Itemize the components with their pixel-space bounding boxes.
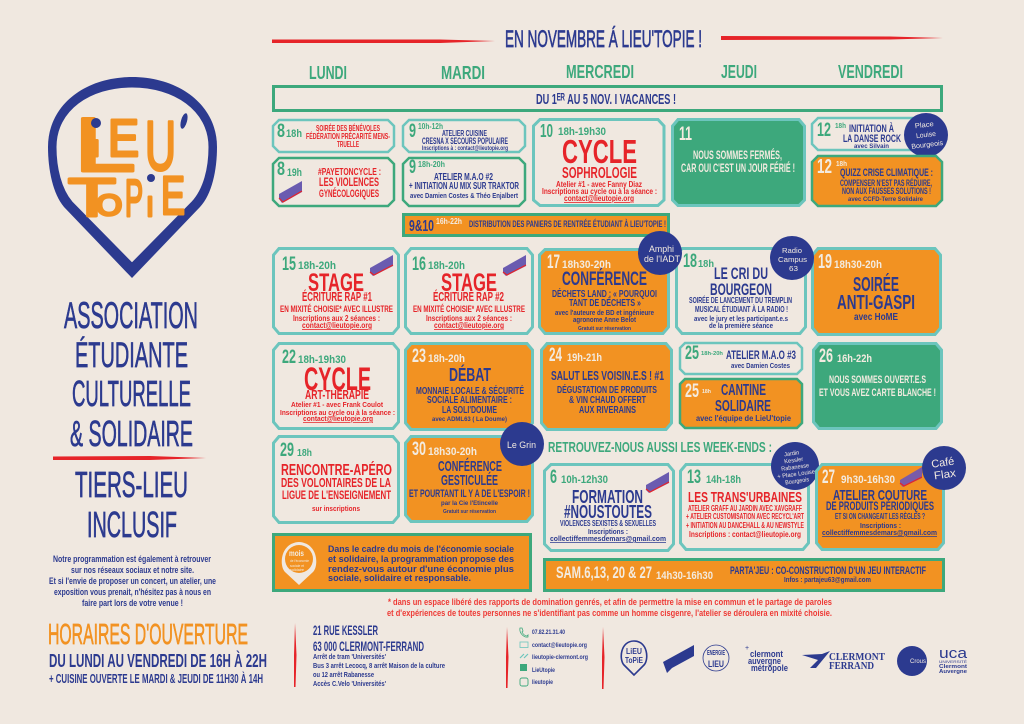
card: 8 soirée des bénévoles: FÉDÉRATION PRÉCARITÉ MENS-	[306, 132, 390, 141]
text block: programme note: Et si l'envie de proposer un concert, un atelier, une	[49, 576, 216, 586]
card: 12 danse rock: avec Silvain	[854, 143, 889, 150]
card: 12 quizz climatique: 12	[817, 156, 832, 178]
card: 25 atelier MAO 3: avec Damien Costes	[731, 363, 790, 370]
card: 17 conférence déchets: TANT DE DÉCHETS »	[569, 296, 641, 309]
location: Jardin Kessler: + Place Louise	[777, 469, 816, 481]
address block: 63 000 CLERMONT-FERRAND	[313, 638, 424, 654]
opening hours: HORAIRES D'OUVERTURE	[48, 619, 248, 651]
card: 13 trans'urbaines: + ATELIER CUSTOMISATION AVEC RECYCL'ART	[686, 512, 804, 521]
card: 8 soirée des bénévoles: TRUELLE	[337, 140, 359, 149]
logo: Lieu'Topie pin: E	[108, 110, 139, 168]
card: 30 conférence gesticulée: 18h30-20h	[428, 446, 477, 458]
card: 30 conférence gesticulée: CONFÉRENCE	[438, 458, 502, 475]
card: 24 salut les voisin.e.s: AUX RIVERAINS	[579, 404, 636, 416]
location: Amphi de l'IADT: Amphi	[649, 244, 674, 254]
logo: circle: LIEU	[708, 659, 724, 669]
card: 18 le cri du bourgeon: 18	[683, 251, 697, 272]
heading: association description: & SOLIDAIRE	[70, 413, 193, 454]
card: 23 débat: DÉBAT	[449, 364, 491, 385]
card: 22 cycle art-thérapie: Inscriptions au cycle ou à la séance :	[280, 408, 395, 417]
card: 24 salut les voisin.e.s: & VIN CHAUD OFFERT	[569, 394, 646, 406]
contacts: 07.82.21.31.40	[532, 629, 565, 636]
card: 15 stage rap 1: STAGE	[308, 269, 364, 297]
card: 13 trans'urbaines: Inscriptions : contact@lieutopie.org	[689, 530, 801, 539]
partner logos	[621, 641, 968, 676]
card: 10 cycle sophrologie: 18h-19h30	[558, 126, 606, 138]
icon: stamp	[503, 255, 526, 276]
icon: stamp	[646, 472, 669, 493]
card: 17 conférence déchets: CONFÉRENCE	[562, 268, 647, 290]
card: 27 atelier couture	[816, 464, 944, 550]
location: Radio Campus 63: Campus	[778, 255, 807, 264]
card: 11 jour férié: 11	[679, 124, 692, 145]
card: 13 trans'urbaines: LES TRANS'URBAINES	[688, 489, 802, 506]
card: 29 rencontre-apéro: sur inscriptions	[312, 504, 360, 513]
address block: ou 12 arrêt Rabanesse	[313, 670, 374, 679]
logo: Lieu'Topie pin: ı	[146, 183, 154, 224]
card: 12 quizz climatique	[812, 156, 942, 206]
icon: mois ESS: sociale et	[290, 563, 305, 568]
card: 15 stage rap 1: 15	[282, 254, 296, 275]
card: 12 danse rock: INITIATION À	[849, 122, 894, 135]
card: 26 carte blanche: ET VOUS AVEZ CARTE BLANCHE !	[819, 387, 936, 399]
weekday headers: MARDI	[441, 63, 485, 83]
card: 27 atelier couture: ET SI ON CHANGEAIT LES RÈGLES ?	[835, 512, 925, 521]
card: 9 atelier MAO 2	[403, 157, 525, 206]
card: 16 stage rap 2: 16	[412, 254, 426, 275]
card: 24 salut les voisin.e.s: DÉGUSTATION DE PRODUITS	[557, 383, 657, 396]
heading: tiers-lieu inclusif	[75, 464, 188, 545]
card: 22 cycle art-thérapie: Atelier #1 - avec Frank Coulot	[291, 400, 383, 409]
card: 17 conférence déchets: agronome Anne Belot	[573, 317, 637, 324]
card: 12 danse rock	[812, 118, 935, 150]
bar: parta'jeu: Infos : partajeu63@gmail.com	[784, 577, 871, 584]
card: 27 atelier couture: ATELIER COUTURE	[833, 487, 927, 504]
card: 25 atelier MAO 3: ATELIER M.A.O #3	[726, 348, 796, 362]
card: 9 atelier MAO 2: + INITIATION AU MIX SUR TRAKTOR	[409, 181, 519, 192]
logo: circle: ENERGIE	[707, 650, 725, 657]
card: 13 trans'urbaines: ATELIER GRAFF AU JARDIN AVEC XAVGRAFF	[688, 504, 802, 513]
logo: Crous	[897, 646, 927, 676]
card: 24 salut les voisin.e.s: SALUT LES VOISIN.E.S ! #1	[551, 368, 664, 383]
card: 16 stage rap 2: ÉCRITURE RAP #2	[433, 289, 504, 304]
opening hours: + CUISINE OUVERTE LE MARDI & JEUDI DE 11H30 À 14H	[49, 671, 263, 686]
contacts: contact@lieutopie.org	[532, 642, 587, 649]
card: 6 formation noustoutes: 6	[550, 467, 557, 488]
bar: parta'jeu: SAM.6,13, 20 & 27	[556, 564, 652, 582]
card: 27 atelier couture: 27	[822, 467, 835, 488]
card: 22 cycle art-thérapie: contact@lieutopie.org	[303, 414, 373, 423]
bar: distribution des paniers: 9&10	[409, 218, 434, 235]
card: 18 le cri du bourgeon: SOIRÉE DE LANCEMENT DU TREMPLIN	[689, 295, 792, 305]
logo: Lieu'Topie small	[621, 641, 647, 675]
card: 10 cycle sophrologie	[534, 120, 664, 206]
card: 18 le cri du bourgeon: avec le jury et les participant.e.s	[694, 316, 788, 323]
card: 19 soirée anti-gaspi: SOIRÉE	[853, 273, 899, 296]
logo: Lieu'Topie pin	[48, 77, 217, 278]
card: 26 carte blanche	[814, 344, 942, 428]
card: 22 cycle art-thérapie: ART-THÉRAPIE	[305, 387, 369, 402]
location: Café Flax: Café	[931, 456, 955, 471]
card: 18 le cri du bourgeon: de la première séance	[709, 323, 773, 330]
card: 10 cycle sophrologie: 10	[540, 121, 553, 141]
card: 22 cycle art-thérapie: 22	[282, 347, 296, 368]
footnote	[387, 597, 832, 619]
location: Jardin Kessler: Kessler	[784, 457, 804, 465]
card: 13 trans'urbaines: + INITIATION AU DANCEHALL & AU NEWSTYLE	[686, 521, 804, 530]
opening hours: DU LUNDI AU VENDREDI DE 16H À 22H	[49, 650, 267, 671]
panel: mois de l'économie sociale et solidaire: Dans le cadre du mois de l'économie sociale	[328, 544, 514, 555]
card: 18 le cri du bourgeon: MUSICAL ÉTUDIANT À LA RADIO !	[695, 304, 788, 314]
card: 8 payetoncycle	[273, 158, 394, 206]
panel: mois de l'économie sociale et solidaire: et solidaire, la programmation propose des	[328, 554, 514, 565]
location: Amphi de l'IADT	[638, 231, 682, 275]
card: 6 formation noustoutes: collectiffemmesdemars@gmail.com	[550, 534, 666, 543]
card: 23 débat: 23	[412, 346, 426, 367]
location: Jardin Kessler: Rabanesse	[781, 463, 810, 473]
location: Le Grin: Le Grin	[507, 440, 536, 451]
logo: Université Clermont Auvergne	[939, 645, 968, 675]
card: 29 rencontre-apéro: 18h	[297, 448, 312, 459]
card: 23 débat: avec ADML63 ( La Doume)	[432, 416, 507, 423]
card: 16 stage rap 2: STAGE	[441, 269, 497, 297]
contacts: LieUtopie	[532, 667, 555, 674]
text block: programme note: exposition vous prenait, n'hésitez pas à nous en	[54, 587, 211, 597]
contacts: lieutopie-clermont.org	[532, 654, 588, 661]
location: Jardin Kessler: Jardin	[784, 450, 800, 458]
card: 12 quizz climatique: NON AUX FAUSSES SOLUTIONS !	[842, 186, 931, 196]
card: 13 trans'urbaines: 13	[687, 467, 701, 488]
card: 12 quizz climatique: COMPENSER N'EST PAS RÉDUIRE,	[840, 178, 932, 188]
logo: Lieu'Topie pin: E	[161, 166, 185, 226]
card: 9 atelier MAO 2: 9	[409, 157, 416, 178]
card: 15 stage rap 1: contact@lieutopie.org	[302, 321, 372, 330]
card: 27 atelier couture: DE PRODUITS PÉRIODIQUES	[826, 498, 934, 513]
logo: Clermont-Ferrand: CLERMONT	[829, 651, 886, 663]
logo: Université Clermont Auvergne: uca	[939, 645, 968, 662]
card: 25 cantine solidaire: 18h	[702, 389, 711, 395]
panel: mois de l'économie sociale et solidaire: rendez-vous autour d'une économie plus	[328, 564, 514, 575]
card: 8 payetoncycle: 8	[277, 159, 285, 180]
card: 8 soirée des bénévoles: 18h	[286, 128, 302, 140]
location: Radio Campus 63: 63	[789, 264, 798, 273]
card: 26 carte blanche: 26	[819, 346, 833, 367]
address block: 21 RUE KESSLER	[313, 622, 378, 638]
card: 17 conférence déchets: 17	[547, 252, 560, 273]
logo: Clermont Auvergne Métropole: auvergne	[748, 656, 781, 666]
icon: instagram	[520, 678, 528, 686]
card: 29 rencontre-apéro	[274, 436, 398, 522]
heading: association description	[64, 295, 198, 454]
panel: mois de l'économie sociale et solidaire: sociale, solidaire et responsable.	[328, 573, 471, 584]
address block	[313, 622, 445, 688]
card: 22 cycle art-thérapie	[274, 344, 398, 428]
location: Le Grin	[500, 422, 544, 466]
logo: circle	[703, 645, 729, 671]
card: 23 débat: 18h-20h	[428, 353, 465, 365]
card: 9 atelier cuisine: 10h-12h	[418, 122, 443, 131]
heading: tiers-lieu inclusif: INCLUSIF	[87, 504, 177, 545]
logo: Clermont Auvergne Métropole: métropole	[751, 663, 788, 673]
card: 25 cantine solidaire: avec l'équipe de LieU'topie	[696, 414, 792, 423]
logo: Clermont-Ferrand: FERRAND	[829, 660, 874, 672]
logo: Lieu'Topie pin: U	[145, 107, 176, 185]
card: 10 cycle sophrologie: SOPHROLOGIE	[562, 165, 637, 182]
card: 10 cycle sophrologie: CYCLE	[562, 133, 637, 170]
location: Café Flax: Flax	[933, 467, 957, 482]
card: 30 conférence gesticulée: par la Cie l'Etincelle	[441, 500, 498, 507]
logo: Clermont Auvergne Métropole: +	[745, 645, 749, 652]
location: Café Flax	[922, 446, 966, 490]
card: 8 soirée des bénévoles	[273, 120, 394, 152]
card: 8 payetoncycle: LES VIOLENCES	[319, 175, 379, 189]
card: 9 atelier cuisine: CRESNA X SECOURS POPULAIRE	[422, 136, 508, 146]
card: 17 conférence déchets: avec l'auteure de BD et ingénieure	[555, 310, 654, 317]
bar: distribution des paniers: DISTRIBUTION DES PANIERS DE RENTRÉE ÉTUDIANT À LIEU'TOPIE !	[469, 219, 666, 230]
weekday headers: MERCREDI	[566, 62, 634, 82]
heading: association description: ASSOCIATION	[64, 295, 198, 336]
card: 19 soirée anti-gaspi: 19	[818, 251, 832, 273]
card: 15 stage rap 1: ÉCRITURE RAP #1	[302, 289, 372, 304]
card: 29 rencontre-apéro: 29	[280, 440, 294, 461]
card: 30 conférence gesticulée	[406, 436, 532, 522]
card: 6 formation noustoutes: FORMATION	[572, 487, 643, 507]
icon: mois ESS: mois	[289, 549, 304, 558]
heading: tiers-lieu inclusif: TIERS-LIEU	[75, 464, 188, 505]
contacts: lieutopie	[532, 679, 553, 686]
address block: Accès C.Velo 'Universités'	[313, 679, 386, 688]
icon: stamp	[900, 467, 922, 487]
card: 16 stage rap 2: 18h-20h	[428, 260, 465, 272]
weekday headers: LUNDI	[309, 63, 347, 83]
card: 8 soirée des bénévoles: SOIRÉE DES BÉNÉVOLES	[316, 124, 380, 133]
card: 13 trans'urbaines	[680, 464, 808, 550]
card: 16 stage rap 2	[406, 248, 532, 334]
weekday headers: JEUDI	[721, 62, 757, 82]
footnote: et d'expériences de toutes personnes ne s'identifiant pas comme un homme cisgenre, l'atelier se déroulera en mixité choisie.	[387, 608, 832, 619]
card: 9 atelier MAO 2: avec Damien Costes & Théo Enjalbert	[410, 191, 518, 200]
card: 17 conférence déchets: Gratuit sur réservation	[578, 326, 632, 332]
contacts	[520, 628, 588, 686]
card: 12 danse rock: 18h	[835, 123, 846, 130]
card: 19 soirée anti-gaspi	[812, 248, 940, 334]
card: 9 atelier cuisine: ATELIER CUISINE	[442, 129, 487, 138]
card: 25 cantine solidaire: 25	[685, 381, 699, 402]
icon: mois ESS: de l'économie	[290, 558, 310, 563]
logo: Lieu'Topie small: LiEU	[626, 647, 642, 656]
card: 18 le cri du bourgeon: LE CRI DU	[714, 264, 768, 283]
card: 15 stage rap 1: Inscriptions aux 2 séances :	[293, 314, 380, 323]
card: 13 trans'urbaines: 14h-18h	[706, 474, 741, 486]
card: 16 stage rap 2: contact@lieutopie.org	[434, 321, 504, 330]
card: 9 atelier MAO 2: 18h-20h	[418, 160, 445, 169]
card: 23 débat	[406, 344, 532, 430]
location: Place Louise Bourgeois: Louise	[916, 131, 937, 140]
card: 24 salut les voisin.e.s: 24	[549, 345, 562, 366]
card: 18 le cri du bourgeon: 18h	[698, 259, 714, 270]
text block: programme note: Notre programmation est également à retrouver	[53, 554, 211, 564]
card: 15 stage rap 1: EN MIXITÉ CHOISIE* AVEC ILLUSTRE	[280, 304, 393, 315]
logo: Crous: Crous	[910, 659, 926, 665]
icon: mail	[520, 642, 528, 648]
card: 9 atelier cuisine: Inscriptions à : contact@lieutopie.org	[422, 146, 508, 152]
card: 25 cantine solidaire: SOLIDAIRE	[715, 398, 771, 415]
logo: Lieu'Topie pin: T	[68, 168, 116, 228]
card: 16 stage rap 2: EN MIXITÉ CHOISIE* AVEC ILLUSTRE	[413, 304, 525, 315]
card: 27 atelier couture: collectiffemmesdemars@gmail.com	[822, 528, 937, 537]
bar: distribution des paniers	[404, 214, 668, 236]
card: 11 jour férié	[672, 120, 804, 206]
logo: Clermont-Ferrand	[802, 651, 886, 672]
logo: Lieu'Topie pin: P	[125, 170, 143, 228]
logo: Lieu'Topie pin: O	[96, 190, 122, 222]
card: 15 stage rap 1: 18h-20h	[298, 260, 336, 272]
card: 15 stage rap 1	[274, 248, 398, 334]
location: Jardin Kessler	[771, 442, 819, 490]
card: 12 quizz climatique: avec CCFD-Terre Solidaire	[848, 196, 923, 203]
card: 23 débat: LA SOLI'DOUME	[442, 405, 497, 416]
opening hours	[48, 619, 267, 686]
card: 8 payetoncycle: GYNÉCOLOGIQUES	[319, 187, 379, 200]
card: 29 rencontre-apéro: DES VOLONTAIRES DE LA	[281, 475, 391, 490]
card: 10 cycle sophrologie: Atelier #1 - avec Fanny Diaz	[556, 180, 642, 189]
panel: mois de l'économie sociale et solidaire	[274, 534, 530, 590]
location: Place Louise Bourgeois: Bourgeois	[911, 140, 944, 151]
location: Radio Campus 63: Radio	[782, 246, 802, 255]
bar: parta'jeu	[544, 560, 944, 590]
card: 25 cantine solidaire	[680, 379, 802, 428]
location: Place Louise Bourgeois	[904, 113, 948, 157]
card: 9 atelier MAO 2: ATELIER M.A.O #2	[434, 171, 493, 183]
card: 6 formation noustoutes: #NOUSTOUTES	[564, 502, 652, 522]
card: 22 cycle art-thérapie: 18h-19h30	[298, 354, 346, 366]
card: 19 soirée anti-gaspi: 18h30-20h	[834, 259, 882, 271]
card: 12 danse rock: LA DANSE ROCK	[843, 133, 901, 145]
card: 25 atelier MAO 3: 18h-20h	[701, 351, 724, 357]
card: 11 jour férié: CAR OUI C'EST UN JOUR FÉRIÉ !	[681, 160, 795, 175]
card: 9 atelier cuisine	[403, 120, 525, 152]
logo: Clermont Auvergne Métropole: clermont	[750, 649, 783, 659]
card: 24 salut les voisin.e.s: 19h-21h	[567, 352, 602, 364]
banner: holidays	[274, 86, 942, 110]
icon: mois ESS: solidaire	[290, 567, 305, 572]
card: 19 soirée anti-gaspi: avec HoME	[854, 312, 898, 323]
card: 10 cycle sophrologie: Inscriptions au cycle ou à la séance :	[542, 187, 657, 196]
card: 9 atelier cuisine: 9	[409, 121, 416, 142]
card: 6 formation noustoutes: Inscriptions :	[588, 527, 628, 536]
address block: Arrêt de tram 'Universités'	[313, 652, 386, 661]
card: 18 le cri du bourgeon: BOURGEON	[710, 280, 772, 299]
card: 29 rencontre-apéro: RENCONTRE-APÉRO	[281, 460, 392, 479]
logo: stamp	[663, 645, 694, 673]
card: 6 formation noustoutes: VIOLENCES SEXISTES & SEXUELLES	[560, 519, 656, 528]
logo: Université Clermont Auvergne: Auvergne	[939, 669, 967, 675]
icon: facebook	[520, 664, 527, 671]
heading: week-ends: RETROUVEZ-NOUS AUSSI LES WEEK-ENDS :	[548, 439, 772, 456]
address block: Bus 3 arrêt Lecocq, 8 arrêt Maison de la culture	[313, 661, 445, 670]
card: 8 soirée des bénévoles: 8	[277, 121, 285, 142]
card: 8 payetoncycle: #PAYETONCYCLE :	[318, 167, 381, 178]
logo: Université Clermont Auvergne: Clermont	[939, 664, 967, 670]
icon: stamp	[370, 255, 393, 276]
logo: Lieu'Topie small: ToPiE	[625, 656, 644, 665]
card: 30 conférence gesticulée: 30	[412, 439, 426, 460]
card: 27 atelier couture: 9h30-16h30	[841, 474, 895, 486]
card: 29 rencontre-apéro: LIGUE DE L'ENSEIGNEMENT	[282, 488, 391, 502]
icon: stamp	[279, 181, 302, 203]
card: 12 quizz climatique: QUIZZ CRISE CLIMATIQUE :	[840, 167, 933, 179]
footnote: * dans un espace libéré des rapports de domination genrés, et afin de permettre la mise en commun et le partage de paroles	[388, 597, 832, 608]
card: 23 débat: MONNAIE LOCALE & SÉCURITÉ	[416, 384, 524, 397]
card: 12 danse rock: 12	[817, 120, 831, 141]
card: 30 conférence gesticulée: ET POURTANT IL Y A DE L'ESPOIR !	[409, 488, 530, 500]
card: 27 atelier couture: Inscriptions :	[860, 521, 901, 530]
icon: link	[520, 654, 528, 658]
bar: distribution des paniers: 16h-22h	[436, 217, 462, 226]
icon: phone	[520, 628, 528, 637]
card: 26 carte blanche: NOUS SOMMES OUVERT.E.S	[829, 374, 926, 386]
logo: Lieu'Topie pin: L	[74, 103, 136, 188]
text block: programme note: faire part lors de votre venue !	[82, 598, 183, 608]
card: 8 payetoncycle: 19h	[287, 167, 302, 179]
location: Radio Campus 63	[770, 236, 814, 280]
heading: association description: ÉTUDIANTE	[75, 336, 188, 375]
card: 30 conférence gesticulée: GESTICULÉE	[441, 472, 498, 489]
bar: parta'jeu: 14h30-16h30	[656, 570, 713, 582]
card: 22 cycle art-thérapie: CYCLE	[304, 361, 371, 397]
banner: holidays: DU 1ᴱᴿ AU 5 NOV. I VACANCES !	[536, 91, 676, 108]
card: 19 soirée anti-gaspi: ANTI-GASPI	[837, 292, 915, 314]
card: 17 conférence déchets: 18h30-20h	[562, 259, 611, 271]
card: 18 le cri du bourgeon	[676, 248, 806, 334]
card: 17 conférence déchets	[540, 250, 668, 334]
card: 25 atelier MAO 3	[680, 343, 802, 374]
title: EN NOVEMBRE Á LIEU'TOPIE !	[505, 26, 702, 53]
heading: association description: CULTURELLE	[72, 373, 191, 414]
weekday headers: VENDREDI	[838, 62, 903, 82]
weekday headers	[309, 62, 903, 83]
card: 11 jour férié: NOUS SOMMES FERMÉS,	[693, 147, 782, 162]
card: 6 formation noustoutes: 10h-12h30	[561, 474, 608, 486]
card: 24 salut les voisin.e.s	[542, 344, 672, 430]
card: 25 cantine solidaire: CANTINE	[721, 382, 766, 399]
logo: Clermont Auvergne Métropole	[745, 645, 788, 673]
text block: programme note: sur nos réseaux sociaux et notre site.	[71, 565, 194, 575]
location: Place Louise Bourgeois: Place	[914, 121, 934, 130]
card: 17 conférence déchets: DÉCHETS LAND ; « POURQUOI	[552, 287, 657, 300]
logo: Lieu'Topie pin: ı	[92, 130, 100, 163]
card: 16 stage rap 2: Inscriptions aux 2 séances :	[426, 314, 512, 323]
card: 26 carte blanche: 16h-22h	[837, 353, 872, 365]
card: 12 quizz climatique: 18h	[836, 161, 847, 168]
location: Amphi de l'IADT: de l'IADT	[644, 254, 680, 264]
card: 23 débat: SOCIALE ALIMENTAIRE :	[427, 395, 512, 406]
card: 30 conférence gesticulée: Gratuit sur réservation	[443, 509, 497, 515]
logo: Université Clermont Auvergne: UNIVERSITÉ	[939, 659, 968, 664]
card: 6 formation noustoutes	[544, 464, 674, 550]
text block: programme note	[49, 554, 216, 608]
card: 25 atelier MAO 3: 25	[685, 343, 699, 364]
location: Jardin Kessler: Bourgeois	[785, 477, 810, 486]
icon: mois ESS	[282, 542, 316, 585]
bar: parta'jeu: PARTA'JEU : CO-CONSTRUCTION D'UN JEU INTERACTIF	[730, 565, 926, 577]
card: 10 cycle sophrologie: contact@lieutopie.org	[564, 194, 634, 203]
